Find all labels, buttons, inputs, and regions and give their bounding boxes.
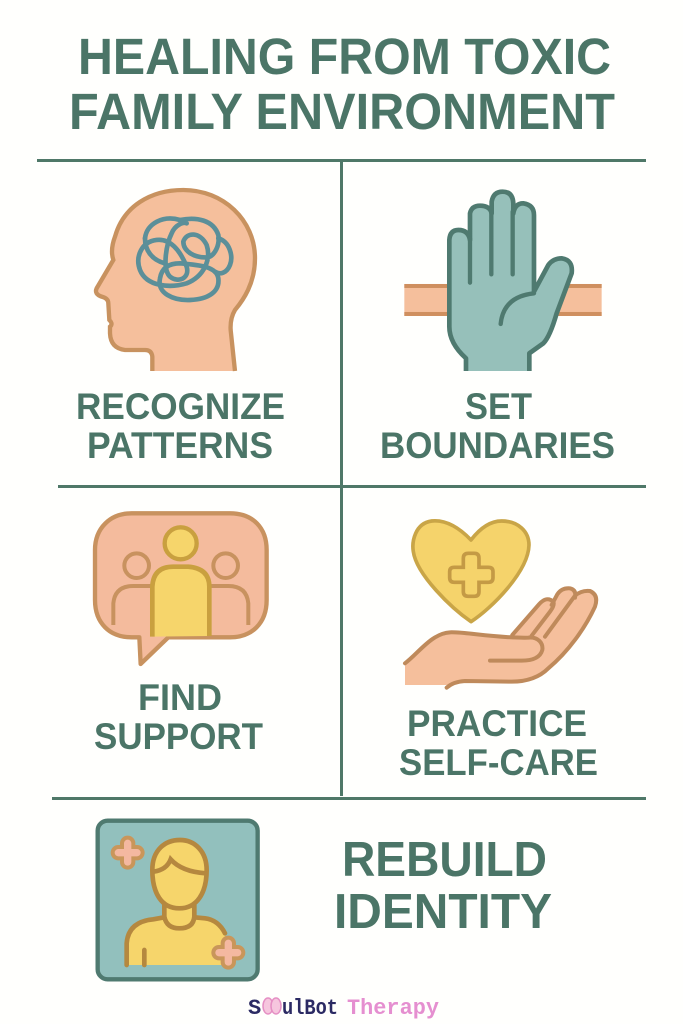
icon: head with tangled thoughts — [96, 190, 255, 371]
label: find support — [94, 677, 263, 757]
label: find support: SUPPORT — [94, 716, 263, 757]
label: practice self-care: SELF-CARE — [399, 742, 598, 783]
label: recognize patterns: PATTERNS — [87, 425, 273, 466]
label: set boundaries: BOUNDARIES — [380, 425, 615, 466]
label: set boundaries — [380, 386, 615, 466]
label: rebuild identity: REBUILD — [342, 833, 547, 887]
icon: support group speech bubble — [95, 513, 267, 664]
logo: SoulBot Therapy: ulBot — [282, 996, 338, 1021]
label: recognize patterns — [76, 386, 285, 466]
icon: raised hand over boundary bar — [404, 192, 602, 371]
title — [69, 28, 615, 140]
label: practice self-care — [399, 703, 598, 783]
label: rebuild identity: IDENTITY — [334, 885, 552, 939]
logo: SoulBot Therapy: Therapy — [347, 996, 439, 1021]
label: find support: FIND — [138, 677, 222, 718]
title: HEALING FROM TOXIC — [78, 28, 611, 85]
label: practice self-care: PRACTICE — [407, 703, 587, 744]
label: set boundaries: SET — [465, 386, 532, 427]
label: recognize patterns: RECOGNIZE — [76, 386, 285, 427]
logo: SoulBot Therapy: S — [248, 996, 261, 1021]
icon: heart in caring hand — [405, 521, 596, 688]
icon: brain in logo — [263, 998, 281, 1014]
icon: rebuilt identity portrait — [98, 821, 258, 979]
label: rebuild identity — [334, 833, 552, 939]
logo: SoulBot Therapy — [248, 996, 439, 1021]
title: FAMILY ENVIRONMENT — [69, 83, 615, 140]
